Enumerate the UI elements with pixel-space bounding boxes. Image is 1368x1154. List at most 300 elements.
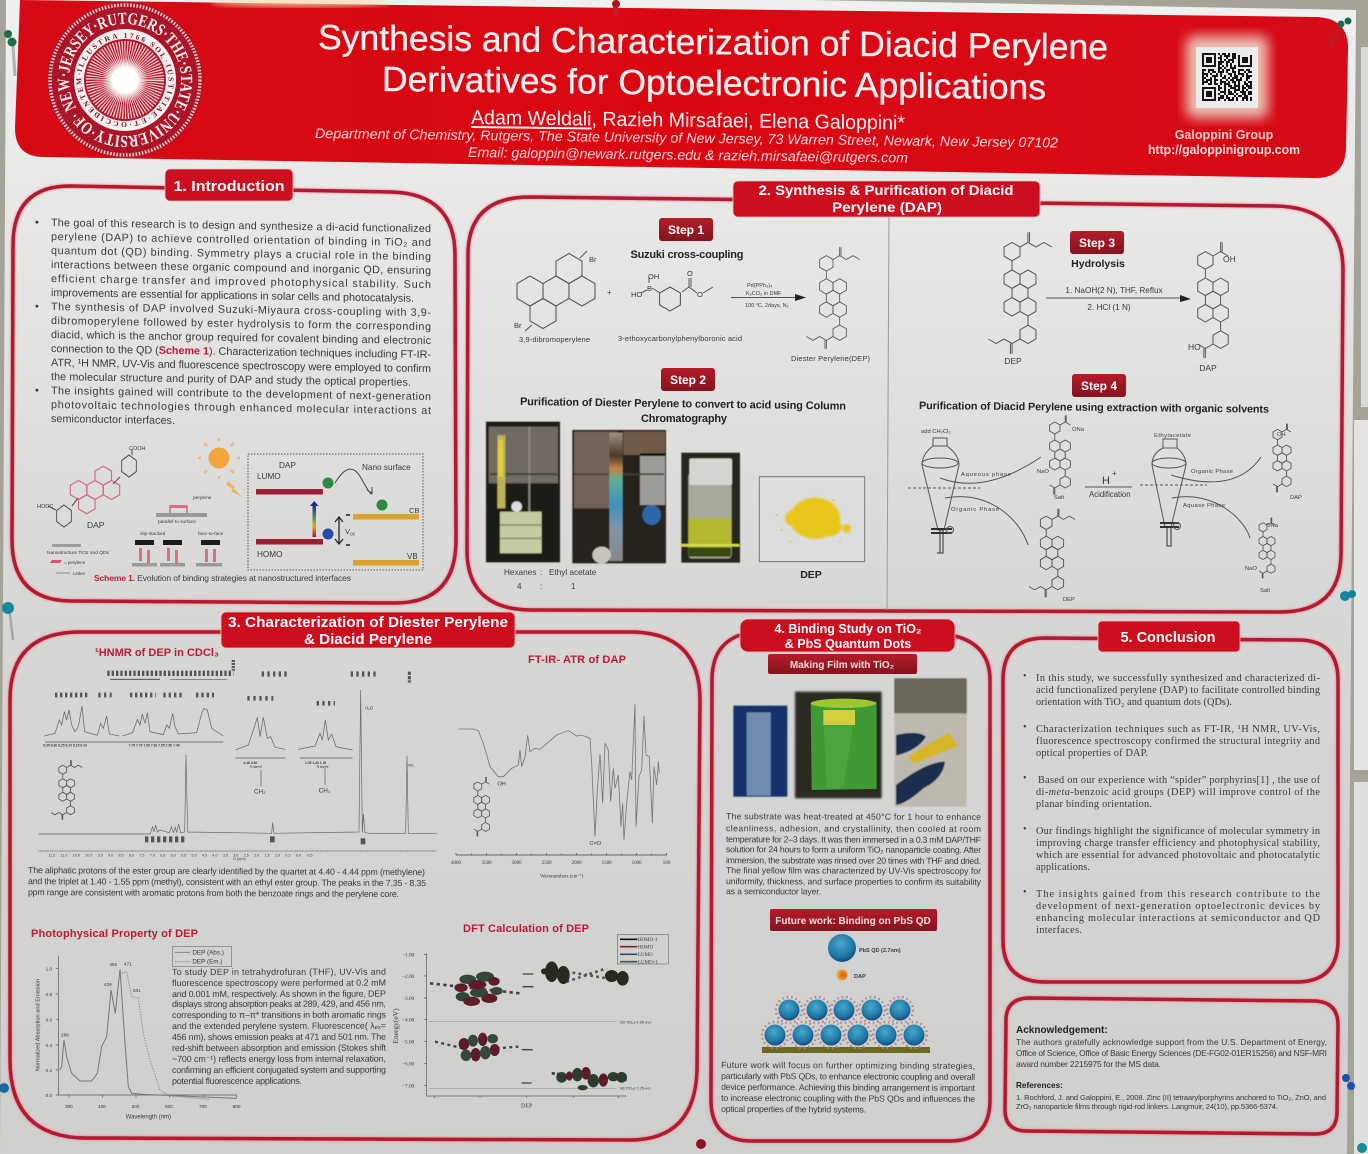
inset peak traces [44, 706, 353, 750]
binding orientation diagrams [132, 495, 224, 566]
extraction labels: NaO [1245, 566, 1257, 572]
step 3 [988, 231, 1236, 373]
FT-IR spectrum chart: 3500 [482, 861, 492, 866]
hydrolysis arrow: 1. NaOH(2 N), THF, Reflux [1065, 286, 1163, 295]
conclusion bullets: improving charge transfer efficiency and photophysical stability, [1036, 838, 1320, 849]
step 2: Step 2 [670, 373, 706, 387]
eluent ratio: 4 [517, 582, 522, 591]
NMR spectrum chart: f1 (ppm) [233, 857, 246, 861]
FT-IR spectrum chart: 4000 [451, 861, 461, 866]
UV-Vis description text: displays strong absorption peaks at 289, 429, and 456 nm, [172, 999, 386, 1009]
UV-Vis description text: confirming an efficient conjugated system and supporting [172, 1065, 386, 1075]
energy level diagram: LUMO [257, 472, 281, 481]
heading: Binding Study: & PbS Quantum Dots [785, 637, 911, 651]
introduction text: The goal of this research is to design and synthesize a di-acid functionalized [51, 217, 431, 235]
NMR caption: and the triplet at 1.40 - 1.55 ppm (methyl), consistent with an ethyl ester group. The peaks in the 7.35 - 8.35 [28, 876, 426, 888]
references text: References: [1016, 1081, 1063, 1090]
step 2: DEP [800, 569, 822, 581]
future work text: particularly with PbS QDs, to enhance electronic coupling and overall [721, 1071, 975, 1082]
binding orientation diagrams: parallel to surface [158, 519, 196, 525]
heading: Characterization: 3. Characterization of Diester Perylene [228, 615, 508, 631]
UV-Vis description text: corresponding to π–π* transitions in both aromatic rings [172, 1010, 387, 1020]
step 3: Step 3 [1079, 236, 1115, 250]
introduction text: semiconductor interfaces. [51, 413, 175, 427]
DFT energy level chart: −2.00 [402, 974, 415, 980]
FT-IR spectrum chart: 2500 [542, 861, 552, 866]
heading: Characterization [221, 612, 515, 648]
introduction text: • [35, 301, 39, 313]
energy level diagram: VB [407, 552, 418, 561]
group name and URL: http://galoppinigroup.com [1148, 143, 1300, 157]
extraction labels: ONa [1266, 523, 1279, 529]
heading: Photophysical: Photophysical Property of DEP [31, 928, 198, 940]
authors: Adam Weldali, Razieh Mirsafaei, Elena Galoppini* [471, 107, 905, 134]
PbS QD legend: PbS QD (2.7nm) [859, 948, 901, 954]
NMR spectrum chart: TMS [406, 764, 414, 768]
conclusion bullets: fluorescence spectroscopy confirmed the structural integrity and [1036, 736, 1321, 747]
introduction text: improvements are essential for applications in solar cells and photocatalysis. [51, 287, 414, 305]
conclusion bullets: • [1023, 887, 1027, 898]
UV-Vis absorption and emission chart: 600 [165, 1104, 173, 1109]
acidification arrow: + [1112, 469, 1117, 478]
boronic acid structure [618, 269, 742, 343]
heading: Binding Study: 4. Binding Study on TiO₂ [774, 622, 922, 636]
NMR spectrum chart: CH₂ [254, 788, 266, 795]
PbS QD legend [828, 934, 901, 980]
extraction labels: NaO [1037, 469, 1049, 475]
heading: Binding Study [740, 619, 955, 652]
future work text [721, 1060, 976, 1115]
acknowledgement text: Office of Science, Office of Basic Energy Sciences (DE-FG02-01ER15256) and NSF-MRI [1016, 1048, 1327, 1058]
heading: DFT: DFT Calculation of DEP [463, 923, 589, 935]
3,9-dibromoperylene structure: Br [589, 255, 597, 264]
hydrolysis arrow [1046, 286, 1191, 312]
DFT energy level chart: CB TiO₂(-4.05 ev) [619, 1019, 651, 1024]
orbital legend: LUMO+1 [638, 960, 658, 965]
introduction text: ATR, ¹H NMR, UV-Vis and fluorescence spectroscopy were employed to confirm [51, 357, 431, 375]
UV-Vis description text: 456 nm), shows emission peaks at 471 and 501 nm. The [172, 1032, 386, 1042]
heading: NMR: ¹HNMR of DEP in CDCl₃ [95, 647, 219, 659]
heading: Conclusion [1098, 621, 1240, 652]
boronic acid structure: O [687, 269, 693, 278]
orbital legend: LUMO [638, 953, 653, 958]
DFT energy level chart: −5.00 [402, 1040, 415, 1046]
introduction text: the molecular structure and purity of DAP and study the optical properties. [51, 371, 411, 389]
boronic acid structure: B [647, 284, 652, 293]
binding orientation diagrams: perylene [193, 495, 212, 501]
acknowledgement text [1016, 1025, 1327, 1069]
conclusion bullets [1023, 671, 1321, 936]
FT-IR spectrum chart: 3000 [512, 861, 522, 866]
extraction labels: Organic Phase [951, 507, 999, 513]
main spectrum [38, 690, 437, 834]
3,9-dibromoperylene structure: 3,9-dibromoperylene [519, 335, 590, 344]
Rutgers seal: NEW·JERSEY·RUTGERS·THE·STATE·UNIVERSITY·OF· [58, 12, 192, 148]
photo: yellow DEP powder [759, 477, 865, 562]
FT-IR spectrum chart: OH [497, 781, 506, 787]
future work text: to increase electronic coupling with the PbS QDs and influences the [721, 1093, 975, 1104]
diester perylene structure: Diester Perylene(DEP) [791, 354, 870, 363]
acidification arrow: H [1102, 475, 1110, 487]
chart legend: DEP (Abs.) [192, 949, 224, 956]
heading: Introduction [165, 169, 293, 201]
binding orientation legend [47, 544, 109, 576]
conclusion bullets: Characterization techniques such as FT-IR, ¹H NMR, UV-Vis, [1036, 724, 1320, 735]
UV-Vis absorption and emission chart: 300 [65, 1104, 73, 1109]
step 4 [908, 374, 1302, 603]
separating funnel: organic extraction [908, 438, 1041, 553]
UV-Vis description text: and the extended perylene system. Fluorescence( λₑₓ= [172, 1021, 386, 1031]
extraction labels: add CH₂Cl₂ [921, 429, 951, 435]
panel: 3. Characterization [10, 612, 700, 1140]
UV-Vis description text: potential fluorescence applications. [172, 1076, 302, 1086]
introduction text: dibromoperylene followed by ester hydrolysis to form the corresponding [51, 315, 431, 333]
heading: Conclusion: 5. Conclusion [1120, 630, 1216, 646]
DEP structure [988, 232, 1052, 366]
DAP molecule structure: DAP [87, 520, 105, 530]
introduction text: • [35, 217, 39, 229]
eluent ratio: Ethyl acetate [549, 568, 597, 577]
UV-Vis description text: red-shift between absorption and emission (Stokes shift [172, 1043, 387, 1053]
panel: acknowledgement and references [1005, 998, 1338, 1134]
NMR spectrum chart: 11.5 11.0 10.5 10.0 9.5 9.0 8.5 8.0 7.5 7.0 6.5 6.0 5.5 5.0 4.5 4.0 3.5 3.0 2.5 2.0 1.5 1.0 0.5 0.0 -0.5 [48, 854, 313, 858]
step 3: Hydrolysis [1071, 258, 1125, 270]
introduction text [35, 217, 432, 431]
photo: yellow coated film in gloved hands [894, 678, 967, 807]
binding orientation legend: Linker [73, 571, 86, 576]
UV-Vis absorption and emission chart [35, 947, 241, 1120]
quantum dot film schematic [762, 997, 930, 1053]
step 1 [511, 218, 870, 363]
step 1: + [607, 288, 612, 297]
orbital legend: HOMO [638, 945, 654, 950]
photo: column with rainbow band [572, 430, 666, 563]
group name and URL [1148, 128, 1300, 157]
step 2: Purification of Diester Perylene to convert to acid using Column [520, 396, 846, 413]
conclusion bullets: optical properties of DAP. [1036, 748, 1148, 759]
UV-Vis absorption and emission chart: 0.6 [46, 1017, 53, 1022]
panel: 4. Binding Study [711, 619, 990, 1141]
DEP inset structure [51, 760, 82, 820]
energy level diagram: DAP [279, 461, 296, 470]
group name and URL: Galoppini Group [1175, 128, 1274, 142]
conclusion bullets: In this study, we successfully synthesized and characterized di- [1036, 673, 1321, 684]
acknowledgement text: Acknowledgement: [1016, 1025, 1108, 1036]
film preparation text: temperature for 2–3 days. It was then immersed in a 0.3 mM DAP/THF [726, 834, 981, 845]
extraction product structures [1029, 415, 1291, 597]
film preparation text: as a semiconductor layer. [726, 886, 821, 896]
chart legend [172, 947, 232, 967]
UV-Vis absorption and emission chart: 289 [61, 1032, 69, 1037]
DAP structure: HO [1188, 342, 1201, 352]
title: Synthesis and Characterization of Diacid Perylene [318, 18, 1108, 67]
heading: Introduction: 1. Introduction [174, 179, 284, 195]
step 2: Chromatography [641, 413, 728, 425]
film preparation text: cleanliness, adhesion, and crystallinity, then cooled at room [726, 823, 981, 834]
subheading: Future work [770, 909, 937, 931]
UV-Vis absorption and emission chart: 501 [133, 988, 141, 993]
NMR spectrum chart: H₂O [365, 705, 374, 710]
extraction labels: Organic Phase [1191, 469, 1233, 475]
acknowledgement text: The authors gratefully acknowledge support from the U.S. Department of Energy, [1016, 1037, 1327, 1047]
FT-IR spectrum chart: Wavenumbers (cm⁻¹) [540, 873, 584, 879]
boronic acid structure: HO [631, 290, 642, 299]
extraction labels: DAP [1290, 495, 1302, 501]
NMR spectrum chart: f1 (ppm) [250, 764, 262, 768]
photo: vial of solution [680, 453, 740, 563]
Rutgers seal: ILLUSTRA 1766 SOL·IUSTITIAE·ET·OCCIDENTEM· [76, 32, 174, 128]
conclusion bullets: orientation with TiO₂ and quantum dots (QDs). [1036, 697, 1232, 708]
DAP molecule structure: COOH [129, 446, 146, 452]
film preparation text: uniformity, thickness, and surface properties to confirm its suitability [726, 876, 982, 887]
eluent ratio: 1 [571, 582, 576, 591]
reaction arrow [731, 283, 806, 309]
film preparation text: immersion, the substrate was rinsed over 20 times with THF and dried. [726, 855, 981, 866]
introduction text: diacid, which is the anchor group required for covalent binding and electronic [51, 329, 432, 347]
orbital: HOMO-1 [552, 1067, 627, 1090]
acknowledgement text: award number 2215975 for the MS data. [1016, 1059, 1161, 1069]
affiliation and email: Department of Chemistry, Rutgers, The State University of New Jersey, 73 Warren Street, Newark, New Jersey 07102 [315, 125, 1058, 150]
conclusion bullets: Our findings highlight the significance of molecular symmetry in [1036, 826, 1320, 837]
binding orientation diagrams: face-to-face [198, 531, 224, 537]
energy level diagram: oc [350, 532, 356, 538]
UV-Vis absorption and emission chart: 800 [233, 1104, 241, 1109]
subheading: Future work: Future work: Binding on PbS QD [775, 916, 931, 927]
NMR caption: ppm range are consistent with aromatic protons from both the benzoate rings and the perylene core. [28, 887, 399, 899]
binding orientation legend: = perylene [64, 560, 86, 565]
DFT energy level chart: −3.00 [402, 996, 415, 1002]
reaction arrow: K₂CO₃ in DMF [746, 291, 782, 297]
eluent ratio: : [540, 582, 542, 591]
inset axes [45, 742, 353, 758]
heading: Synthesis and Purification [733, 181, 1040, 217]
eluent ratio [504, 568, 597, 591]
photo: TiO2 glass slide [733, 706, 787, 797]
chart legend: DEP (Em.) [192, 959, 222, 966]
binding orientation diagrams: slip-stacked [140, 531, 166, 537]
energy level diagram: CB [409, 506, 419, 515]
NMR spectrum chart: 7.75 7.70 7.65 7.60 7.55 7.50 7.45 [129, 744, 180, 748]
orbital: HOMO [435, 1033, 518, 1061]
heading: Synthesis and Purification: 2. Synthesis & Purification of Diacid [758, 182, 1014, 198]
introduction text: interactions between these organic compound and inorganic QD, ensuring [51, 259, 431, 277]
panel: 3. Characterization: Energy(eV) [391, 1008, 400, 1044]
separating funnel: acidified extraction [1140, 439, 1261, 546]
extraction labels: Aquase Phase [1183, 503, 1225, 509]
UV-Vis absorption and emission chart: 471 [124, 961, 132, 966]
panel: 1. Introduction [12, 169, 456, 603]
introduction text: perylene (DAP) to achieve controlled orientation of binding in TiO₂ and [51, 231, 431, 249]
conclusion bullets: di-meta-benzoic acid groups (DEP) will improve control of the [1036, 787, 1320, 798]
DFT energy level chart: −1.00 [402, 952, 415, 958]
heading: Synthesis and Purification: Perylene (DAP) [832, 199, 942, 215]
boronic acid structure: O [697, 290, 703, 299]
energy level diagram [248, 454, 423, 570]
FT-IR spectrum chart [451, 704, 671, 879]
FT-IR spectrum chart: 2000 [572, 861, 582, 866]
step 4: Purification of Diacid Perylene using extraction with organic solvents [919, 400, 1269, 416]
NMR spectrum chart [38, 660, 437, 861]
future work text: device performance. Achieving this binding arrangement is important [721, 1082, 976, 1093]
step 1: Suzuki cross-coupling [630, 249, 744, 261]
film preparation text [726, 811, 982, 897]
subheading: Making Film: Making Film with TiO₂ [790, 660, 894, 671]
introduction text: efficient charge transfer and improved photophysical stability. Such [51, 273, 431, 291]
panel: 2. Synthesis and Purification [467, 181, 1343, 612]
film preparation text: solution for 24 hours to form a uniform TiO₂ nanoparticle coating. After [726, 844, 981, 855]
title [318, 18, 1108, 108]
FT-IR spectrum chart: 500 [663, 861, 671, 866]
acidification arrow: Acidification [1089, 490, 1131, 499]
step 4: Step 4 [1081, 379, 1117, 393]
DAP structure [1188, 242, 1236, 373]
hydrolysis arrow: 2. HCl (1 N) [1087, 303, 1131, 312]
UV-Vis description text: fluorescence spectroscopy were performed at 0.2 mM [172, 978, 386, 988]
NMR spectrum chart: 8.35 8.30 8.25 8.20 8.15 8.10 [43, 744, 87, 748]
introduction text: photovoltaic technologies through enhanced molecular interactions at [51, 399, 431, 417]
future work text: Future work will focus on further optimizing binding strategies, [721, 1060, 975, 1071]
conclusion bullets: • [1023, 722, 1027, 733]
scheme caption: Scheme 1. Evolution of binding strategies at nanostructured interfaces [94, 573, 351, 583]
extraction labels: Aqueous phase [961, 472, 1011, 478]
FT-IR spectrum chart: 1000 [632, 861, 642, 866]
banner glare [210, 0, 390, 7]
reaction arrow: 100 °C, 2days, N₂ [745, 303, 789, 309]
DFT energy level chart: −4.00 [402, 1018, 415, 1024]
UV-Vis absorption and emission chart: Wavelength (nm) [126, 1114, 171, 1120]
UV-Vis description text: and 0.001 mM, respectively. As shown in the figure, DEP [172, 989, 386, 999]
UV-Vis absorption and emission chart: 0.4 [46, 1043, 53, 1048]
UV-Vis absorption and emission chart: 0.0 [46, 1093, 53, 1098]
energy level diagram: HOMO [257, 550, 282, 559]
conclusion bullets: which are essential for advanced photovoltaic and photocatalytic [1036, 850, 1320, 861]
extraction labels: ONa [1072, 427, 1085, 433]
panel: 5. Conclusion [1003, 621, 1338, 982]
subheading: Making Film [768, 654, 917, 674]
heading: FT-IR: FT-IR- ATR of DAP [528, 654, 626, 666]
step 2 [486, 368, 865, 591]
FT-IR spectrum chart: C=O [589, 841, 602, 847]
DFT energy level chart: DEP [521, 1104, 533, 1110]
DEP structure: DEP [1004, 356, 1022, 366]
UV-Vis absorption and emission chart: 500 [132, 1104, 140, 1109]
conclusion bullets: • [1023, 824, 1027, 835]
conclusion bullets: enhancing molecular interactions at semiconductor and QD [1036, 913, 1321, 924]
extraction labels: DEP [1063, 597, 1075, 603]
UV-Vis absorption and emission chart: 400 [98, 1104, 106, 1109]
boronic acid structure: 3-ethoxycarbonylphenylboronic acid [618, 334, 742, 343]
3,9-dibromoperylene structure: Br [514, 321, 522, 330]
title: Derivatives for Optoelectronic Applications [382, 60, 1046, 107]
NMR spectrum chart: 1.45 1.40 1.35 [305, 761, 326, 765]
UV-Vis absorption and emission chart: 429 [104, 982, 112, 987]
orbital: LUMO+1 [430, 972, 520, 1006]
DFT energy level chart [402, 934, 668, 1110]
heading: Characterization: & Diacid Perylene [304, 632, 432, 648]
extraction labels: Salt [1260, 588, 1270, 594]
DFT energy level chart: −7.00 [402, 1083, 415, 1089]
UV-Vis absorption and emission chart: 1.0 [46, 966, 53, 971]
DAP inset structure [474, 777, 489, 836]
extraction labels [921, 427, 1302, 603]
photos: film preparation [733, 678, 967, 807]
references text: ZrO₂ nanoparticle films through rigid-rod linkers. Langmuir, 24(10), pp.5366-5374. [1016, 1102, 1278, 1111]
FT-IR spectrum chart: 1500 [602, 861, 612, 866]
diester perylene structure [791, 247, 870, 363]
introduction text: • [35, 385, 39, 397]
conclusion bullets: Based on our experience with “spider” porphyrins[1] , the use of [1038, 775, 1321, 786]
DFT energy level chart: VB TiO₂(-7.25 ev) [619, 1085, 651, 1090]
neighbouring poster sheets [1354, 47, 1368, 1154]
film preparation text: The final yellow film was characterized by UV-Vis spectroscopy for [726, 865, 981, 876]
NMR caption [28, 865, 426, 899]
references text [1016, 1081, 1326, 1111]
conclusion bullets: development of next-generation optoelectronic devices by [1036, 901, 1321, 912]
UV-Vis description text: To study DEP in tetrahydrofuran (THF), UV-Vis and [172, 967, 386, 977]
UV-Vis description text [172, 967, 387, 1086]
NMR caption: The aliphatic protons of the ester group are clearly identified by the quartet at 4.40 - 4.44 ppm (methylene) [28, 865, 425, 877]
NMR spectrum chart: CH₃ [319, 787, 331, 794]
DAP molecule structure [37, 446, 146, 530]
photos: column chromatography [486, 422, 865, 563]
UV-Vis absorption and emission chart: Normalized Absorption and Emission [35, 979, 41, 1071]
UV-Vis absorption and emission chart: 700 [199, 1104, 207, 1109]
conclusion bullets: The insights gained from this research contribute to the [1036, 889, 1320, 900]
extraction labels: OH [1277, 432, 1286, 438]
orbital legend [617, 934, 668, 965]
introduction text: connection to the QD (Scheme 1). Characterization techniques including FT-IR- [51, 343, 431, 361]
photo: column with rack [486, 422, 560, 562]
DAP structure: DAP [1199, 363, 1217, 373]
future work text: optical properties of the hybrid systems. [721, 1104, 866, 1114]
banner [15, 0, 1348, 178]
introduction text: The insights gained will contribute to the development of next-generation [51, 385, 431, 403]
NMR spectrum chart: f1 (ppm) [317, 764, 328, 768]
UV-Vis absorption and emission chart: 456 [109, 962, 118, 967]
affiliation and email [315, 125, 1058, 167]
DFT energy level chart: −6.00 [402, 1061, 415, 1067]
step 1: Step 1 [668, 223, 704, 237]
UV-Vis absorption and emission chart: 0.2 [46, 1068, 53, 1073]
film preparation text: The substrate was heat-treated at 450°C for 1 hour to enhance [726, 811, 981, 822]
NMR spectrum chart: 4.46 4.40 [243, 761, 257, 765]
3,9-dibromoperylene structure [511, 250, 601, 344]
conclusion bullets: acid functionalized perylene (DAP) to facilitate controlled binding [1036, 685, 1320, 696]
references text: 1. Rochford, J. and Galoppini, E., 2008. Zinc (II) tetraarylporphyrins anchored to TiO₂, ZnO, and [1016, 1093, 1326, 1102]
conclusion bullets: • [1023, 773, 1027, 784]
icon: sun and lightning [198, 438, 242, 497]
energy level diagram: V [345, 527, 350, 536]
conclusion bullets: planar binding orientation. [1036, 799, 1152, 810]
UV-Vis description text: ~700 cm⁻¹) reflects energy loss from internal relaxation, [172, 1054, 386, 1064]
reaction arrow: Pd(PPh₃)₄ [747, 283, 773, 289]
extraction labels: Salt [1054, 495, 1064, 501]
affiliation and email: Email: galoppin@newark.rutgers.edu & razieh.mirsafaei@rutgers.com [468, 144, 908, 166]
binding orientation legend: Nanostructure TiO2 and QDs [47, 550, 109, 556]
energy level diagram: Nano surface [362, 463, 411, 472]
eluent ratio: : [540, 568, 542, 577]
conclusion bullets: • [1023, 671, 1027, 682]
orbital: LUMO [541, 961, 629, 986]
peak label bars [55, 660, 409, 703]
introduction text: The synthesis of DAP involved Suzuki-Miyaura cross-coupling with 3,9- [51, 301, 431, 319]
extraction labels: Ethylacetate [1154, 433, 1191, 439]
photo: beaker with green solution [795, 692, 882, 798]
UV-Vis absorption and emission chart: 0.8 [46, 992, 53, 997]
PbS QD legend: DAP [854, 974, 866, 980]
QR code [1186, 36, 1268, 118]
DAP structure: OH [1223, 254, 1236, 264]
